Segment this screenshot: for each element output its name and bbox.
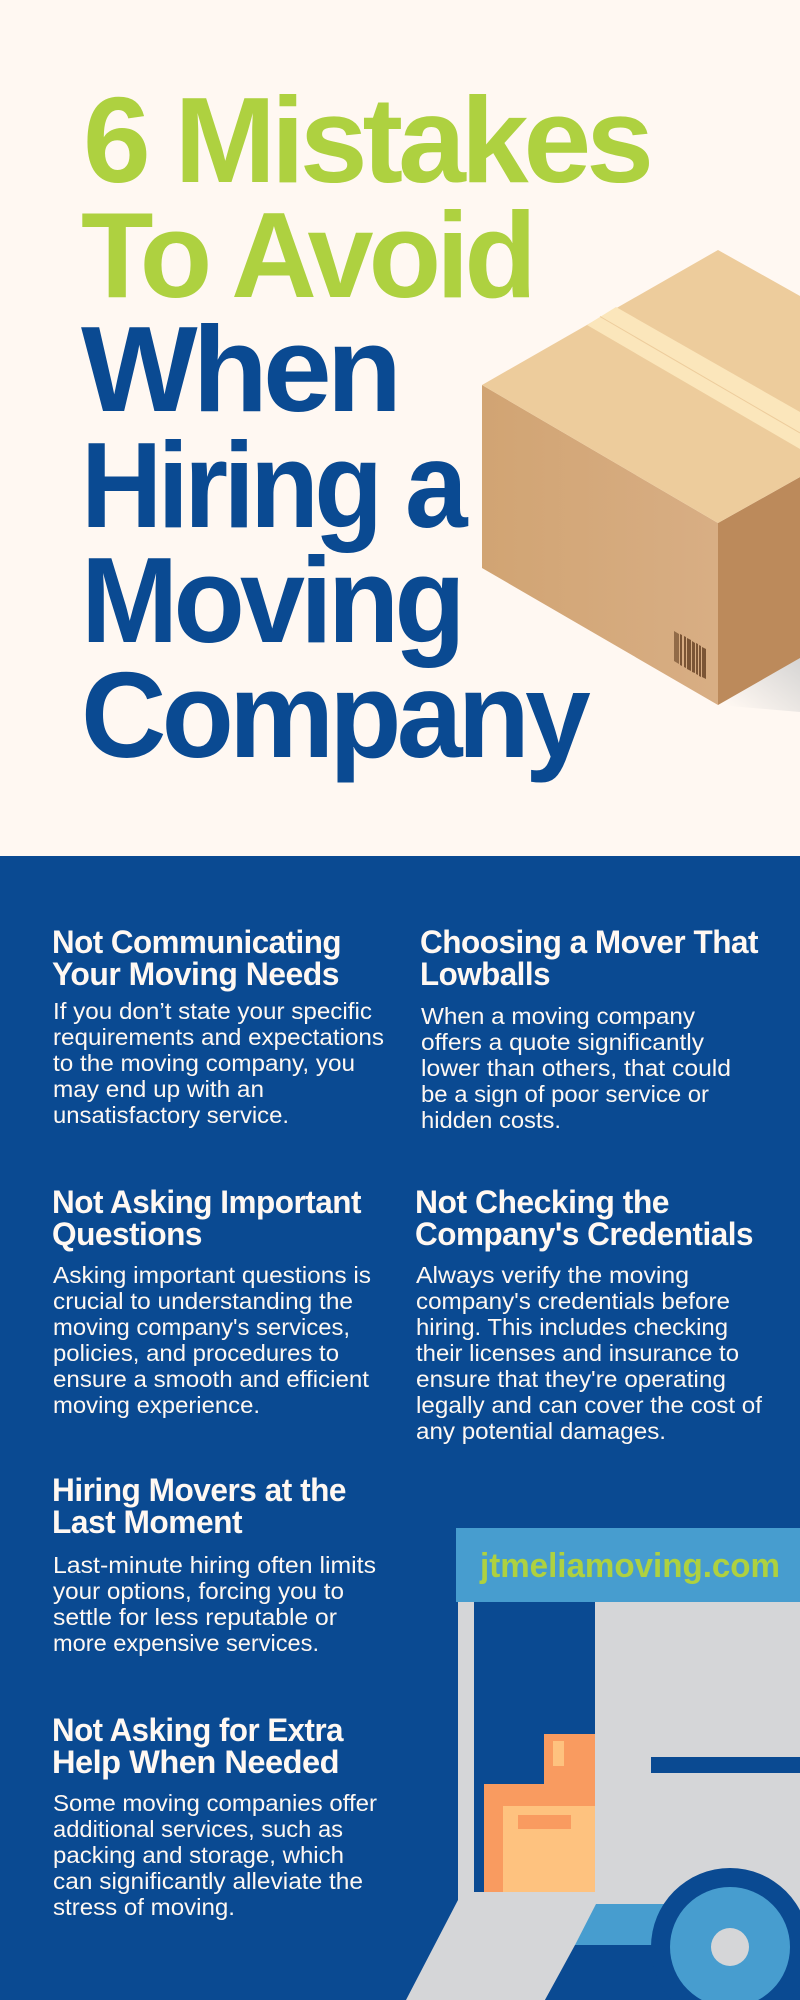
body text: lower than others, that could bbox=[421, 1055, 731, 1081]
mistake: hiring last moment bbox=[52, 1472, 376, 1656]
heading bbox=[415, 1184, 753, 1252]
title: blue lines: Hiring a bbox=[81, 417, 469, 553]
body text: hiring. This includes checking bbox=[416, 1314, 728, 1340]
body text: hidden costs. bbox=[421, 1107, 561, 1133]
truck cargo door opening bbox=[474, 1602, 595, 1892]
boxes inside truck bbox=[484, 1734, 595, 1892]
heading: Choosing a Mover That bbox=[420, 924, 759, 960]
heading: Questions bbox=[52, 1216, 202, 1252]
heading: Hiring Movers at the bbox=[52, 1472, 346, 1508]
body text bbox=[53, 1262, 371, 1418]
body text: be a sign of poor service or bbox=[421, 1081, 709, 1107]
heading: Your Moving Needs bbox=[52, 956, 339, 992]
body text: offers a quote significantly bbox=[421, 1029, 705, 1055]
title: green lines: To Avoid bbox=[81, 187, 532, 323]
body text bbox=[53, 1552, 376, 1656]
body text: Asking important questions is bbox=[53, 1262, 371, 1288]
heading: Lowballs bbox=[420, 956, 550, 992]
website sign bbox=[456, 1528, 800, 1602]
heading: Not Communicating bbox=[52, 924, 341, 960]
body text: stress of moving. bbox=[53, 1894, 235, 1920]
body text: Some moving companies offer bbox=[53, 1790, 377, 1816]
body text: ensure a smooth and efficient bbox=[53, 1366, 370, 1392]
body text: company's credentials before bbox=[416, 1288, 730, 1314]
panel: mistakes bbox=[0, 856, 800, 2000]
mistake: lowball quote bbox=[420, 924, 759, 1133]
body text: any potential damages. bbox=[416, 1418, 666, 1444]
body text: Last-minute hiring often limits bbox=[53, 1552, 376, 1578]
body text: requirements and expectations bbox=[53, 1024, 384, 1050]
body text: can significantly alleviate the bbox=[53, 1868, 363, 1894]
heading bbox=[52, 1184, 362, 1252]
body text: moving company's services, bbox=[53, 1314, 350, 1340]
heading: Last Moment bbox=[52, 1504, 243, 1540]
body text: When a moving company bbox=[421, 1003, 696, 1029]
website sign: jtmeliamoving.com bbox=[479, 1547, 780, 1585]
body text: their licenses and insurance to bbox=[416, 1340, 739, 1366]
body text: If you don’t state your specific bbox=[53, 998, 372, 1024]
body text: unsatisfactory service. bbox=[53, 1102, 289, 1128]
illustration: moving truck bbox=[406, 1528, 800, 2000]
title: green lines: 6 Mistakes bbox=[83, 72, 649, 208]
truck lower trim bbox=[545, 1904, 800, 2000]
truck side stripe bbox=[651, 1757, 800, 1773]
body text: ensure that they're operating bbox=[416, 1366, 726, 1392]
mistake: extra help bbox=[52, 1712, 377, 1920]
body text bbox=[53, 1790, 377, 1920]
heading: Not Asking for Extra bbox=[52, 1712, 344, 1748]
body text: settle for less reputable or bbox=[53, 1604, 337, 1630]
truck wheel bbox=[651, 1868, 800, 2000]
heading bbox=[52, 1712, 344, 1780]
mistake: not checking credentials bbox=[415, 1184, 763, 1444]
body text bbox=[53, 998, 384, 1128]
mistake: not communicating bbox=[52, 924, 384, 1128]
body text bbox=[416, 1262, 763, 1444]
title: green lines bbox=[81, 72, 649, 323]
heading: Not Asking Important bbox=[52, 1184, 362, 1220]
title bbox=[81, 72, 649, 783]
body text: moving experience. bbox=[53, 1392, 260, 1418]
title: blue lines bbox=[81, 301, 591, 783]
body text: more expensive services. bbox=[53, 1630, 319, 1656]
body text bbox=[421, 1003, 731, 1133]
icon: barcode bbox=[674, 631, 706, 679]
body text: your options, forcing you to bbox=[53, 1578, 344, 1604]
icon: cardboard box bbox=[482, 250, 800, 712]
title: blue lines: When bbox=[81, 301, 397, 437]
body text: packing and storage, which bbox=[53, 1842, 344, 1868]
heading: Help When Needed bbox=[52, 1744, 339, 1780]
title: blue lines: Company bbox=[81, 647, 591, 783]
heading bbox=[52, 1472, 346, 1540]
body text: to the moving company, you bbox=[53, 1050, 355, 1076]
heading: Not Checking the bbox=[415, 1184, 669, 1220]
body text: legally and can cover the cost of bbox=[416, 1392, 763, 1418]
body text: crucial to understanding the bbox=[53, 1288, 353, 1314]
heading bbox=[52, 924, 341, 992]
body text: policies, and procedures to bbox=[53, 1340, 339, 1366]
body text: Always verify the moving bbox=[416, 1262, 689, 1288]
mistake: not asking questions bbox=[52, 1184, 371, 1418]
heading bbox=[420, 924, 759, 992]
title: blue lines: Moving bbox=[81, 532, 461, 668]
heading: Company's Credentials bbox=[415, 1216, 753, 1252]
truck body bbox=[406, 1602, 800, 2000]
body text: may end up with an bbox=[53, 1076, 264, 1102]
body text: additional services, such as bbox=[53, 1816, 343, 1842]
